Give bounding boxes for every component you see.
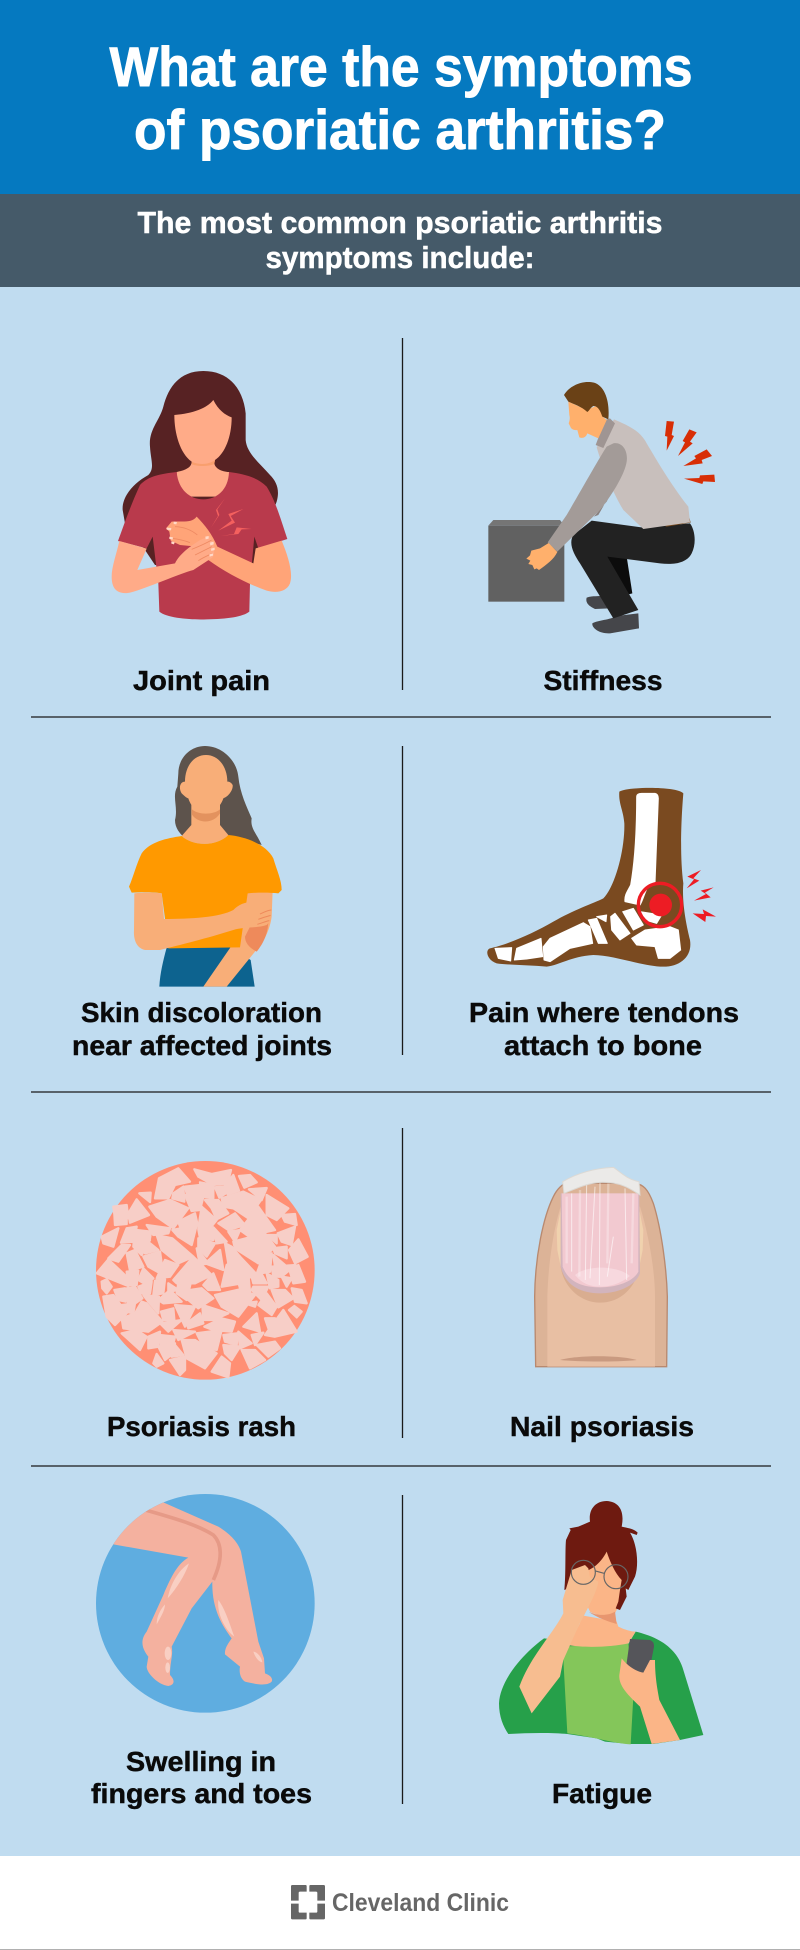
title banner: What are the symptoms: [110, 35, 692, 98]
footer band: [0, 1856, 800, 1950]
panel: swelling: [91, 1492, 315, 1809]
label: swelling in fingers and toes: fingers and toes: [91, 1778, 312, 1809]
label: swelling in fingers and toes: Swelling in: [126, 1746, 276, 1777]
icon: fingertip with pitted nail: [535, 1167, 667, 1367]
logo: Cleveland Clinic cross mark: [291, 1885, 325, 1919]
label: pain where tendons attach to bone: attach to bone: [504, 1030, 702, 1061]
title banner: of psoriatic arthritis?: [134, 98, 666, 161]
panel: stiffness: [488, 382, 715, 696]
label: pain where tendons attach to bone: [469, 997, 739, 1061]
icon: woman holding wrist: [112, 371, 291, 619]
icon: swollen legs in circle: [96, 1492, 315, 1713]
icon: man lifting a box: [488, 382, 715, 633]
panel: fatigue: [499, 1501, 703, 1809]
label: stiffness: Stiffness: [544, 665, 662, 696]
title banner: [0, 0, 800, 194]
panel: skin discoloration: [72, 746, 332, 1061]
panel: tendon pain: [469, 788, 739, 1061]
panel: psoriasis rash: [96, 1161, 315, 1442]
label: pain where tendons attach to bone: Pain where tendons: [469, 997, 739, 1028]
label: nail psoriasis: Nail psoriasis: [510, 1411, 694, 1442]
icon: cracked skin circle: [96, 1161, 315, 1380]
label: swelling in fingers and toes: [91, 1746, 312, 1809]
panel: nail psoriasis: [510, 1167, 694, 1442]
icon: woman with discolored arm: [129, 746, 282, 987]
label: skin discoloration near affected joints: Skin discoloration: [81, 997, 322, 1028]
label: skin discoloration near affected joints: near affected joints: [72, 1030, 332, 1061]
subtitle banner: [0, 194, 800, 287]
logo wordmark: Cleveland Clinic: [332, 1889, 509, 1917]
subtitle banner: The most common psoriatic arthritis: [138, 205, 662, 240]
label: fatigue: Fatigue: [552, 1778, 652, 1809]
icon: foot skeleton with heel pain: [487, 788, 716, 967]
subtitle banner: symptoms include:: [266, 240, 534, 275]
icon: tired woman with glasses and phone: [499, 1501, 703, 1744]
label: skin discoloration near affected joints: [72, 997, 332, 1061]
label: joint pain: Joint pain: [133, 665, 270, 696]
panel: joint pain: [112, 371, 291, 696]
label: psoriasis rash: Psoriasis rash: [107, 1411, 296, 1442]
